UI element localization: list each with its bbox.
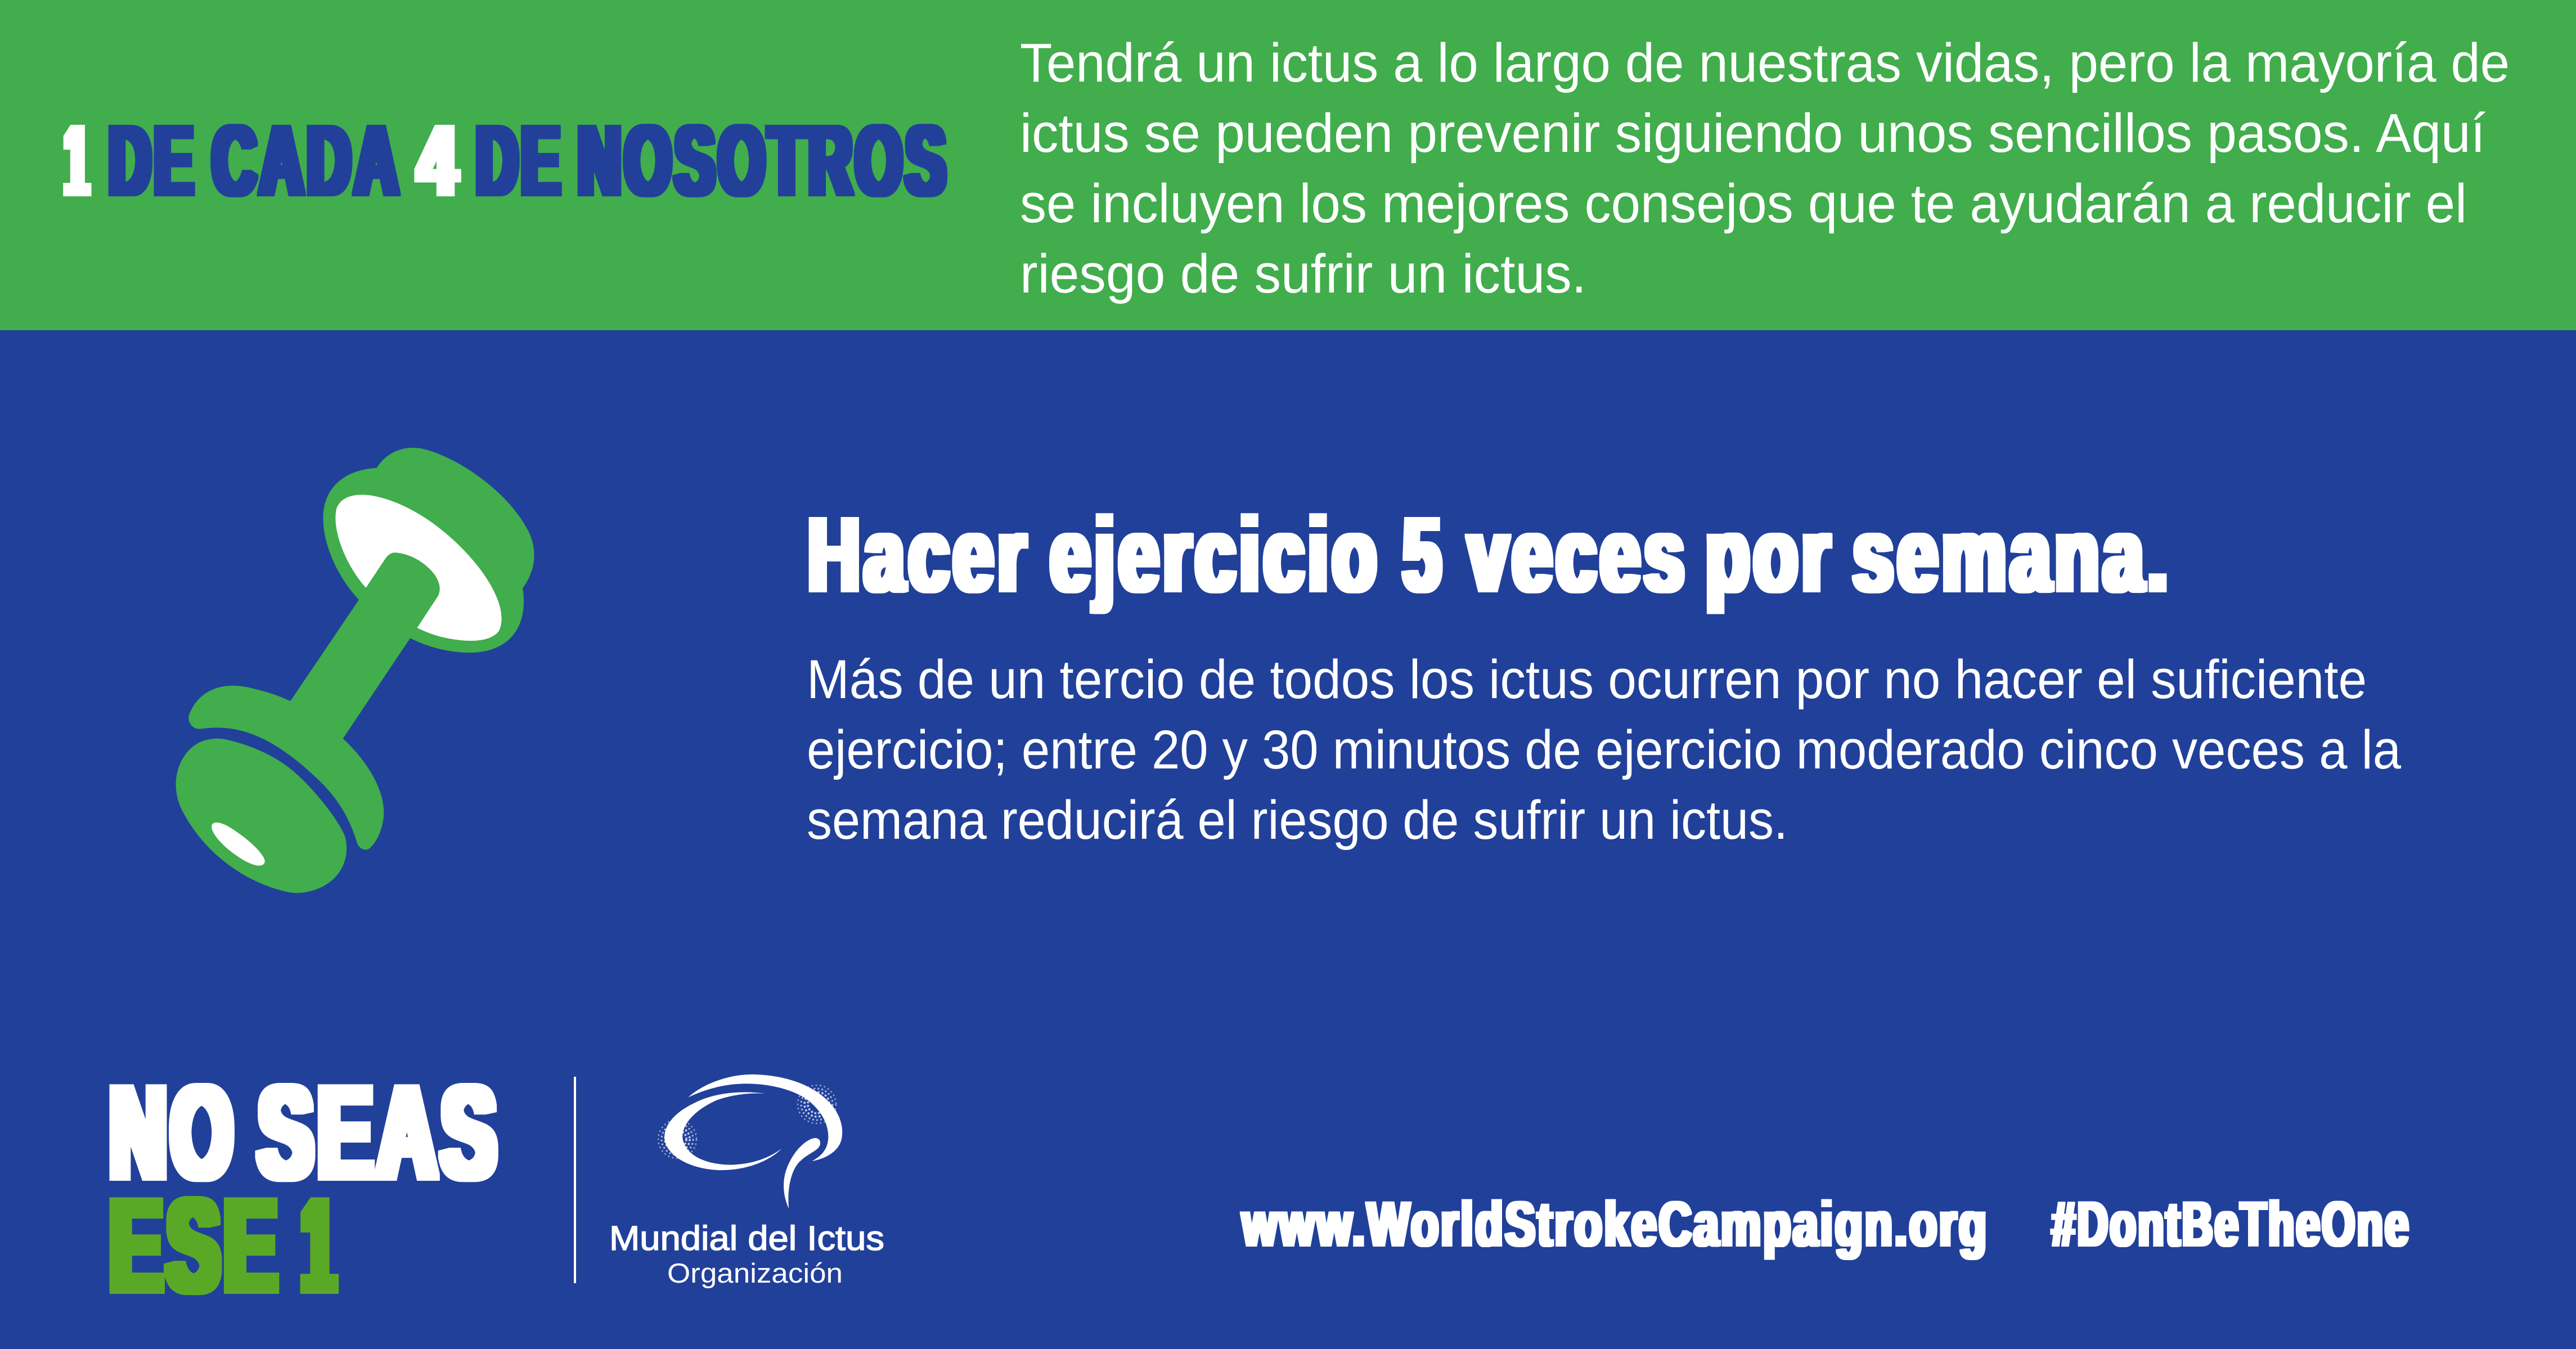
main heading: 5 — [1403, 497, 1441, 613]
slogan: no seas ese 1: NO — [110, 1060, 237, 1206]
logo brain mark — [664, 1074, 842, 1208]
header heading: 1 de cada 4 de nosotros: 1 — [65, 106, 88, 216]
header paragraph: se incluyen los mejores consejos que te ayudarán a reducir el — [1020, 173, 2467, 234]
main heading: semana. — [1853, 497, 2172, 613]
body paragraph — [807, 649, 2401, 851]
logo text — [609, 1219, 884, 1289]
slogan: no seas ese 1: 1 — [302, 1173, 335, 1319]
header paragraph — [1020, 32, 2510, 304]
main heading: veces — [1468, 497, 1688, 613]
header heading: 1 de cada 4 de nosotros — [65, 106, 950, 216]
divider line — [574, 1077, 576, 1283]
logo text: Organización — [667, 1258, 843, 1289]
header heading: 1 de cada 4 de nosotros: DE — [476, 106, 564, 216]
header paragraph: Tendrá un ictus a lo largo de nuestras vidas, pero la mayoría de — [1020, 32, 2510, 93]
slogan: no seas ese 1: ESE — [110, 1173, 281, 1319]
body paragraph: semana reducirá el riesgo de sufrir un ictus. — [807, 789, 1788, 851]
body paragraph: Más de un tercio de todos los ictus ocurren por no hacer el suficiente — [807, 649, 2367, 710]
logo dots — [658, 1085, 836, 1158]
slogan: no seas ese 1: SEAS — [258, 1060, 501, 1206]
main heading: ejercicio — [1050, 497, 1381, 613]
header heading: 1 de cada 4 de nosotros: DE — [109, 106, 197, 216]
header band — [0, 0, 2576, 330]
body paragraph: ejercicio; entre 20 y 30 minutos de ejercicio moderado cinco veces a la — [807, 719, 2401, 780]
main heading — [808, 497, 2172, 613]
campaign url: www.WorldStrokeCampaign.org — [1242, 1189, 1989, 1259]
header heading: 1 de cada 4 de nosotros: 4 — [417, 106, 457, 216]
header heading: 1 de cada 4 de nosotros: CADA — [213, 106, 402, 216]
logo: Organización Mundial del Ictus — [609, 1074, 884, 1289]
header paragraph: ictus se pueden prevenir siguiendo unos sencillos pasos. Aquí — [1020, 102, 2485, 164]
logo text: Mundial del Ictus — [609, 1219, 884, 1257]
slogan: no seas ese 1 — [110, 1060, 501, 1319]
header heading: 1 de cada 4 de nosotros: NOSOTROS — [578, 106, 950, 216]
main heading: por — [1706, 497, 1834, 613]
icon: dumbbell — [176, 448, 534, 893]
main heading: Hacer — [808, 497, 1030, 613]
header paragraph: riesgo de sufrir un ictus. — [1020, 243, 1586, 304]
hashtag: #DontBeTheOne — [2052, 1189, 2411, 1259]
